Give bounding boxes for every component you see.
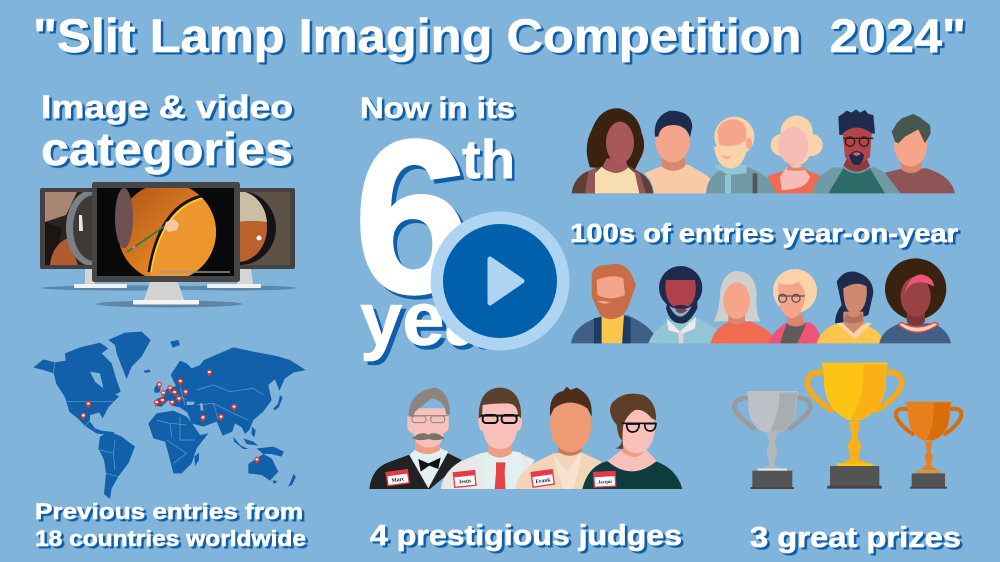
person 6 xyxy=(885,114,955,193)
person 9 xyxy=(711,271,776,343)
text: 4 prestigious judges: 4 prestigious judges xyxy=(370,520,682,552)
text: th: th xyxy=(462,128,515,190)
panel: worldwide entries xyxy=(33,332,306,551)
play button xyxy=(430,212,570,350)
person 1 xyxy=(572,108,653,193)
person 2 xyxy=(644,111,717,193)
person 11 xyxy=(817,271,884,343)
name badge: Jacqui: Jacqui xyxy=(598,480,613,486)
people row 1 xyxy=(572,108,955,193)
text: 3 great prizes: 3 great prizes xyxy=(750,522,961,554)
judge: Jesús xyxy=(441,388,535,489)
name badge: Jesús: Jesús xyxy=(458,478,472,486)
judge: Marc xyxy=(369,388,462,489)
caption: previous entries xyxy=(35,499,306,551)
world map with pins xyxy=(33,332,306,499)
caption: previous entries: 18 countries worldwide xyxy=(35,526,306,551)
panel: judges xyxy=(369,387,682,552)
text: now in its: Now in its xyxy=(360,92,515,125)
illustration: three monitors with eye images xyxy=(40,182,296,308)
panel: image and video categories xyxy=(40,89,296,308)
heading: image & video categories: categories xyxy=(41,123,293,175)
person 5 xyxy=(813,109,901,193)
person 3 xyxy=(706,117,777,193)
panel: prizes xyxy=(735,363,961,554)
caption: previous entries: Previous entries from xyxy=(35,499,303,524)
bronze trophy xyxy=(896,402,961,489)
judges illustration xyxy=(369,387,682,489)
person 7 xyxy=(571,264,657,343)
title: "Slit Lamp Imaging Competition 2024" xyxy=(33,9,966,62)
panel: now in its 6th year xyxy=(354,92,570,362)
trophies xyxy=(735,363,961,489)
heading: image & video categories xyxy=(41,89,293,175)
judge: Frank xyxy=(515,387,602,489)
numeral: 6: 6 xyxy=(354,96,470,339)
text: year: year xyxy=(360,277,516,362)
gold trophy xyxy=(807,363,902,489)
name badge: Marc: Marc xyxy=(391,476,405,484)
heading: image & video categories: Image & video xyxy=(41,89,293,125)
text: 100s of entries: 100s of entries year-on-year xyxy=(570,218,958,248)
person 12 xyxy=(879,258,951,343)
person 10 xyxy=(768,269,822,343)
judge: Jacqui xyxy=(582,394,682,489)
name badge: Frank: Frank xyxy=(535,477,552,485)
person 8 xyxy=(648,266,726,343)
person 4 xyxy=(767,116,830,193)
panel: entrants xyxy=(570,108,958,343)
silver trophy xyxy=(735,391,810,489)
people row 2 xyxy=(571,258,951,343)
